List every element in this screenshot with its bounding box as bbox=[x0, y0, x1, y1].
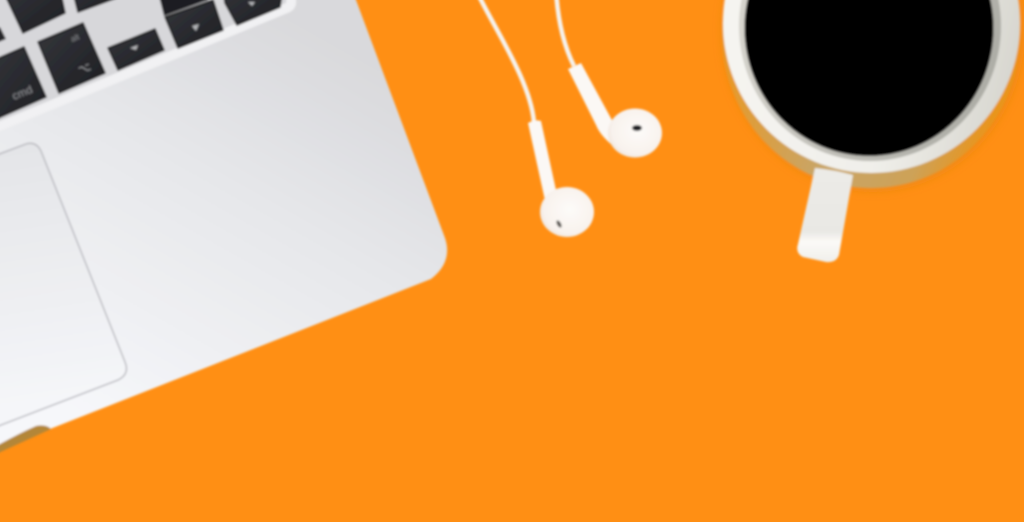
inner wall bbox=[739, 0, 1001, 161]
laptop bbox=[0, 0, 447, 466]
cable: right earbud bbox=[556, 0, 574, 66]
coffee bbox=[744, 0, 994, 156]
key: right arrow bbox=[222, 0, 284, 25]
keyboard well bbox=[0, 0, 290, 133]
cup outer wall bbox=[722, 0, 1020, 188]
key: left edge bbox=[0, 27, 6, 50]
laptop base edge bbox=[0, 425, 51, 466]
arrow glyph: left bbox=[130, 45, 138, 50]
keyboard bezel strip bbox=[0, 0, 296, 144]
cup rim bbox=[723, 0, 1020, 173]
key label: cmd: cmd bbox=[11, 84, 34, 103]
cable: left earbud bbox=[476, 0, 534, 122]
earphones bbox=[476, 0, 662, 237]
trackpad bbox=[0, 143, 126, 437]
speaker hole: left bbox=[555, 220, 563, 228]
cup shadow bbox=[721, 0, 1024, 192]
key: upper left bbox=[0, 0, 65, 33]
earbud: right bbox=[568, 63, 662, 158]
key: left arrow bbox=[108, 29, 164, 70]
earbud: left bbox=[528, 120, 594, 237]
arrow glyph: right bbox=[248, 2, 255, 6]
key: up and down arrows bbox=[155, 0, 223, 48]
coffee cup bbox=[721, 0, 1024, 262]
speaker hole: right bbox=[632, 125, 642, 131]
cup handle bbox=[797, 168, 853, 262]
key label: alt: alt bbox=[69, 32, 81, 44]
key label: option symbol: ⌥ bbox=[77, 61, 93, 77]
laptop body bbox=[0, 0, 447, 460]
key: cmd bbox=[0, 47, 46, 126]
arrow glyph: down bbox=[192, 24, 199, 31]
key: option bbox=[38, 23, 105, 93]
key: upper middle bbox=[70, 0, 116, 12]
